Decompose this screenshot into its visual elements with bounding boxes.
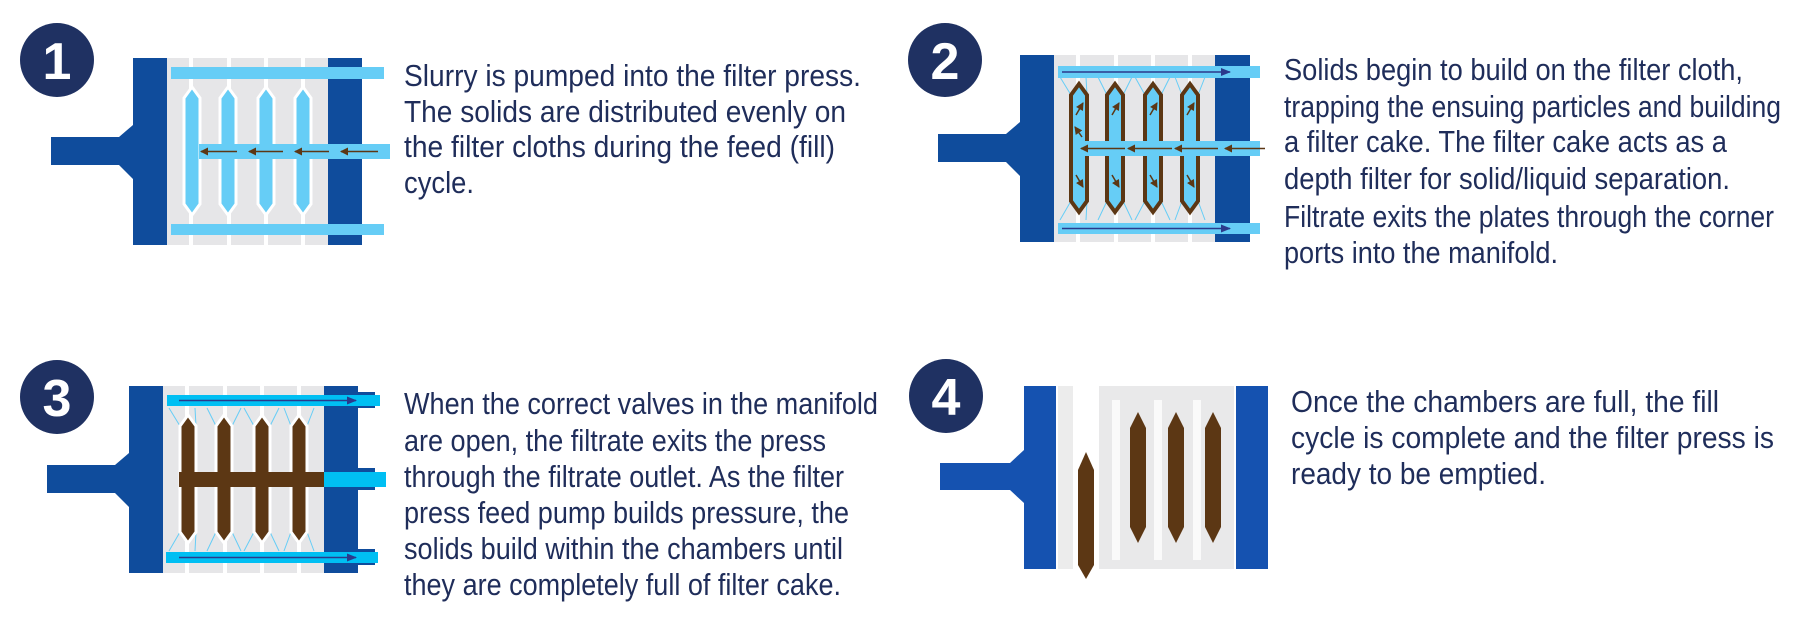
text: step 3 description: press feed pump builds pressure, the [404,495,849,530]
text: step 2 description: Solids begin to build on the filter cloth, [1284,52,1743,87]
panel: step 1 [20,23,861,245]
diagram: filter press feed [51,58,390,245]
diagram: chambers full [940,386,1268,579]
icon: number 3 [20,360,94,434]
panel: step 2 [908,23,1781,270]
text: step 1 description: the filter cloths during the feed (fill) [404,129,835,164]
icon: number 4: 4 [932,369,961,427]
text: step 1 description [404,58,861,200]
text: step 3 description: solids build within the chambers until [404,531,843,566]
text: step 2 description: a filter cake. The filter cake acts as a [1284,124,1728,159]
icon: number 2 [908,23,982,97]
text: step 3 description: they are completely full of filter cake. [404,567,841,602]
text: step 2 description [1284,52,1781,270]
text: step 1 description: Slurry is pumped into the filter press. [404,58,861,93]
text: step 4 description: ready to be emptied. [1291,456,1546,491]
text: step 3 description: When the correct valves in the manifold [404,386,878,421]
text: step 3 description: through the filtrate outlet. As the filter [404,459,844,494]
text: step 1 description: cycle. [404,165,474,200]
text: step 3 description [404,386,878,602]
text: step 3 description: are open, the filtrate exits the press [404,423,826,458]
text: step 2 description: ports into the manifold. [1284,235,1558,270]
panel: step 4 [909,359,1774,579]
diagram: filtrate outlet [47,386,386,573]
text: step 1 description: The solids are distributed evenly on [404,94,846,129]
text: step 4 description [1291,384,1774,491]
icon: number 3: 3 [43,370,71,428]
diagram: cake building [938,55,1265,242]
icon: number 4 [909,359,983,433]
icon: number 2: 2 [931,33,959,91]
panel: step 3 [20,360,878,602]
text: step 2 description: depth filter for solid/liquid separation. [1284,161,1730,196]
text: step 4 description: Once the chambers are full, the fill [1291,384,1719,419]
icon: number 1 [20,23,94,97]
icon: number 1: 1 [43,33,71,91]
